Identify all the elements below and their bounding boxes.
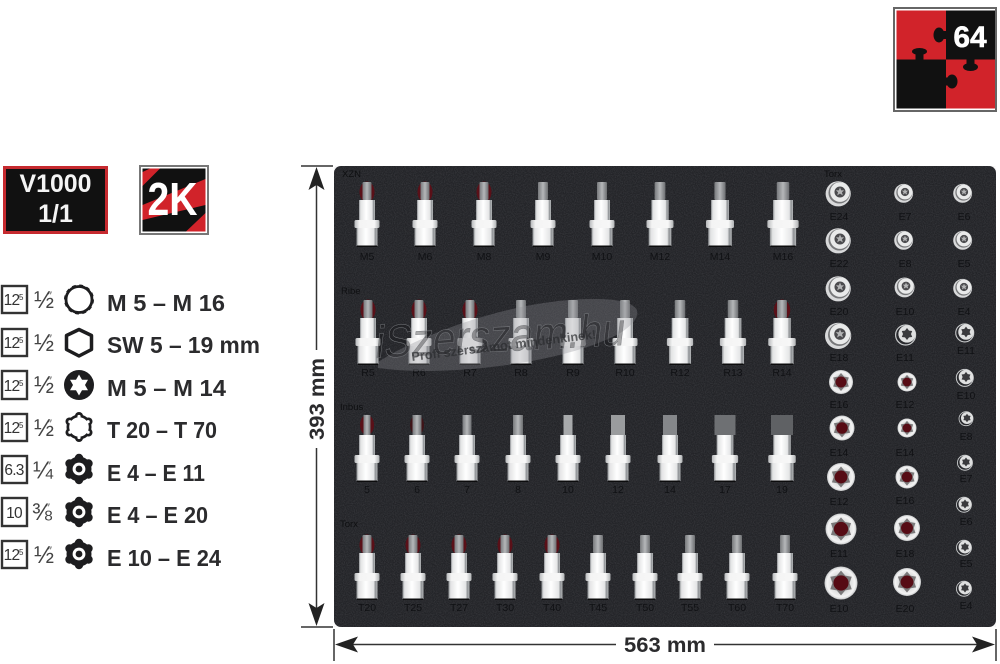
E-Torx column 2: E11	[896, 352, 914, 364]
legend row: M 5 – M 16: 5	[19, 293, 24, 302]
Torx row: T30	[496, 602, 514, 614]
E-Torx column 3: E4	[958, 306, 971, 318]
Ribe row: R7	[463, 367, 477, 379]
legend row: M 5 – M 16: 12	[4, 292, 19, 309]
Inbus row: 6	[414, 484, 420, 496]
legend row: E 4 – E 11: 6.3	[4, 462, 24, 479]
Inbus row: 19	[776, 484, 788, 496]
legend row: M 5 – M 14	[2, 370, 226, 401]
legend: drive sizes and profiles	[2, 285, 260, 571]
XZN row: M10	[592, 251, 612, 263]
foam tray panel	[334, 166, 996, 627]
legend row: E 4 – E 20: E 4 – E 20	[107, 502, 208, 528]
legend row: E 4 – E 11: E 4 – E 11	[107, 460, 205, 486]
Torx row: T70	[776, 602, 794, 614]
height dimension: 393 mm: 393 mm	[306, 358, 329, 440]
Inbus row: 8	[515, 484, 521, 496]
E-Torx column 3: E8	[960, 431, 973, 443]
E-Torx column 1: E20	[830, 306, 848, 318]
XZN row: XZN	[342, 169, 361, 180]
Torx row: T27	[450, 602, 468, 614]
Ribe row: R10	[615, 367, 635, 379]
Inbus row	[340, 402, 796, 496]
Torx row: T55	[681, 602, 699, 614]
legend row: E 10 – E 24	[2, 539, 221, 571]
E-Torx column 1: E14	[830, 447, 848, 459]
legend row: SW 5 – 19 mm: ½	[34, 330, 54, 357]
legend row: T 20 – T 70: T 20 – T 70	[107, 417, 217, 443]
legend row: T 20 – T 70: ″	[48, 418, 52, 430]
Torx row: T40	[543, 602, 561, 614]
E-Torx column 2: E8	[899, 258, 912, 270]
legend row: SW 5 – 19 mm	[2, 329, 260, 358]
badge: V1000 1/1: 1/1	[38, 200, 73, 228]
Torx row: Torx	[340, 519, 358, 530]
Ribe row: R13	[723, 367, 743, 379]
legend row: M 5 – M 14: M 5 – M 14	[107, 375, 226, 401]
E-Torx column 3: E5	[958, 258, 971, 270]
legend row: E 10 – E 24: E 10 – E 24	[107, 545, 221, 571]
Ribe row: R6	[412, 367, 426, 379]
badge: V1000 1/1: V1000	[20, 170, 92, 198]
legend row: M 5 – M 14: ½	[34, 372, 54, 399]
XZN row: M9	[536, 251, 550, 263]
E-Torx column 1: E22	[830, 258, 848, 270]
legend row: E 10 – E 24: ½	[34, 542, 54, 569]
legend row: E 10 – E 24: 5	[19, 548, 24, 557]
legend row: E 4 – E 11: ″	[47, 460, 51, 472]
Torx row	[340, 519, 798, 614]
legend row: M 5 – M 14: ″	[48, 375, 52, 387]
legend row: E 10 – E 24: ″	[48, 545, 52, 557]
E-Torx column 3: E6	[960, 516, 973, 528]
E-Torx column 2	[893, 184, 921, 615]
E-Torx column 1	[824, 169, 858, 615]
legend row: SW 5 – 19 mm: 5	[19, 336, 24, 345]
Inbus row: Inbus	[340, 402, 363, 413]
Torx row: T25	[404, 602, 422, 614]
E-Torx column 1: Torx	[824, 169, 842, 180]
Inbus row: 14	[664, 484, 676, 496]
E-Torx column 3: E11	[957, 345, 975, 357]
E-Torx column 2: E7	[899, 211, 912, 223]
Ribe row: R5	[361, 367, 375, 379]
E-Torx column 3: E4	[960, 600, 973, 612]
watermark: iSzerszam.hu: iSzerszam.hu	[373, 303, 629, 368]
width dimension: 563 mm	[334, 629, 996, 661]
XZN row: M16	[773, 251, 793, 263]
height dimension: 393 mm	[301, 166, 333, 627]
Ribe row: R9	[566, 367, 580, 379]
E-Torx column 2: E16	[896, 495, 914, 507]
legend row: T 20 – T 70: ½	[34, 415, 54, 442]
legend row: E 4 – E 11	[2, 454, 205, 486]
Torx row: T60	[728, 602, 746, 614]
XZN row	[342, 169, 799, 263]
E-Torx column 1: E10	[830, 603, 848, 615]
Inbus row: 7	[464, 484, 470, 496]
Ribe row	[341, 286, 796, 379]
legend row: E 4 – E 20: 10	[6, 505, 23, 522]
E-Torx column 1: E16	[830, 399, 848, 411]
legend row: E 10 – E 24: 12	[4, 547, 19, 564]
E-Torx column 1: E11	[830, 548, 848, 560]
legend row: M 5 – M 16	[2, 285, 225, 316]
Ribe row: R14	[772, 367, 792, 379]
badge: 2K	[140, 166, 208, 234]
E-Torx column 2: E20	[896, 603, 914, 615]
legend row: E 4 – E 20: ″	[46, 502, 50, 514]
legend row: E 4 – E 20	[2, 497, 208, 528]
Torx row: T45	[589, 602, 607, 614]
E-Torx column 1: E18	[830, 352, 848, 364]
legend row: M 5 – M 16: ″	[48, 290, 52, 302]
legend row: M 5 – M 14: 5	[19, 379, 24, 388]
legend row: SW 5 – 19 mm: SW 5 – 19 mm	[107, 332, 260, 358]
legend row: E 4 – E 11: ¼	[33, 457, 54, 484]
Inbus row: 12	[612, 484, 624, 496]
legend row: M 5 – M 16: M 5 – M 16	[107, 290, 225, 316]
legend row: M 5 – M 14: 12	[4, 378, 19, 395]
XZN row: M5	[360, 251, 374, 263]
legend row: T 20 – T 70: 5	[19, 421, 24, 430]
Torx row: T50	[636, 602, 654, 614]
legend row: SW 5 – 19 mm: ″	[48, 333, 52, 345]
E-Torx column 3: E6	[958, 211, 971, 223]
legend row: SW 5 – 19 mm: 12	[4, 335, 19, 352]
E-Torx column 3: E7	[960, 473, 973, 485]
E-Torx column 3: E5	[960, 558, 973, 570]
Inbus row: 10	[562, 484, 574, 496]
XZN row: M6	[418, 251, 432, 263]
E-Torx column 3: E10	[957, 390, 975, 402]
E-Torx column 2: E14	[896, 447, 914, 459]
E-Torx column 2: E10	[896, 306, 914, 318]
number 64: 64	[953, 21, 987, 54]
XZN row: M12	[650, 251, 670, 263]
legend row: E 4 – E 20: ⅜	[32, 499, 53, 526]
badge: V1000 1/1	[4, 168, 106, 232]
Inbus row: 17	[719, 484, 731, 496]
Torx row: T20	[358, 602, 376, 614]
XZN row: M14	[710, 251, 730, 263]
XZN row: M8	[477, 251, 491, 263]
E-Torx column 1: E12	[830, 496, 848, 508]
watermark: iSzerszam.hu: Profi szerszámot mindenkinek!	[411, 327, 597, 364]
legend row: T 20 – T 70: 12	[4, 420, 19, 437]
E-Torx column 3	[953, 184, 975, 612]
Inbus row: 5	[364, 484, 370, 496]
width dimension: 563 mm: 563 mm	[624, 634, 706, 657]
E-Torx column 2: E12	[896, 399, 914, 411]
Ribe row: R8	[514, 367, 528, 379]
badge: 64 puzzle	[894, 8, 996, 111]
legend row: T 20 – T 70	[2, 412, 217, 443]
legend row: M 5 – M 16: ½	[34, 287, 54, 314]
E-Torx column 2: E18	[896, 548, 914, 560]
Ribe row: Ribe	[341, 286, 361, 297]
badge: 2K: 2K	[148, 173, 198, 225]
Ribe row: R12	[670, 367, 690, 379]
E-Torx column 1: E24	[830, 211, 848, 223]
